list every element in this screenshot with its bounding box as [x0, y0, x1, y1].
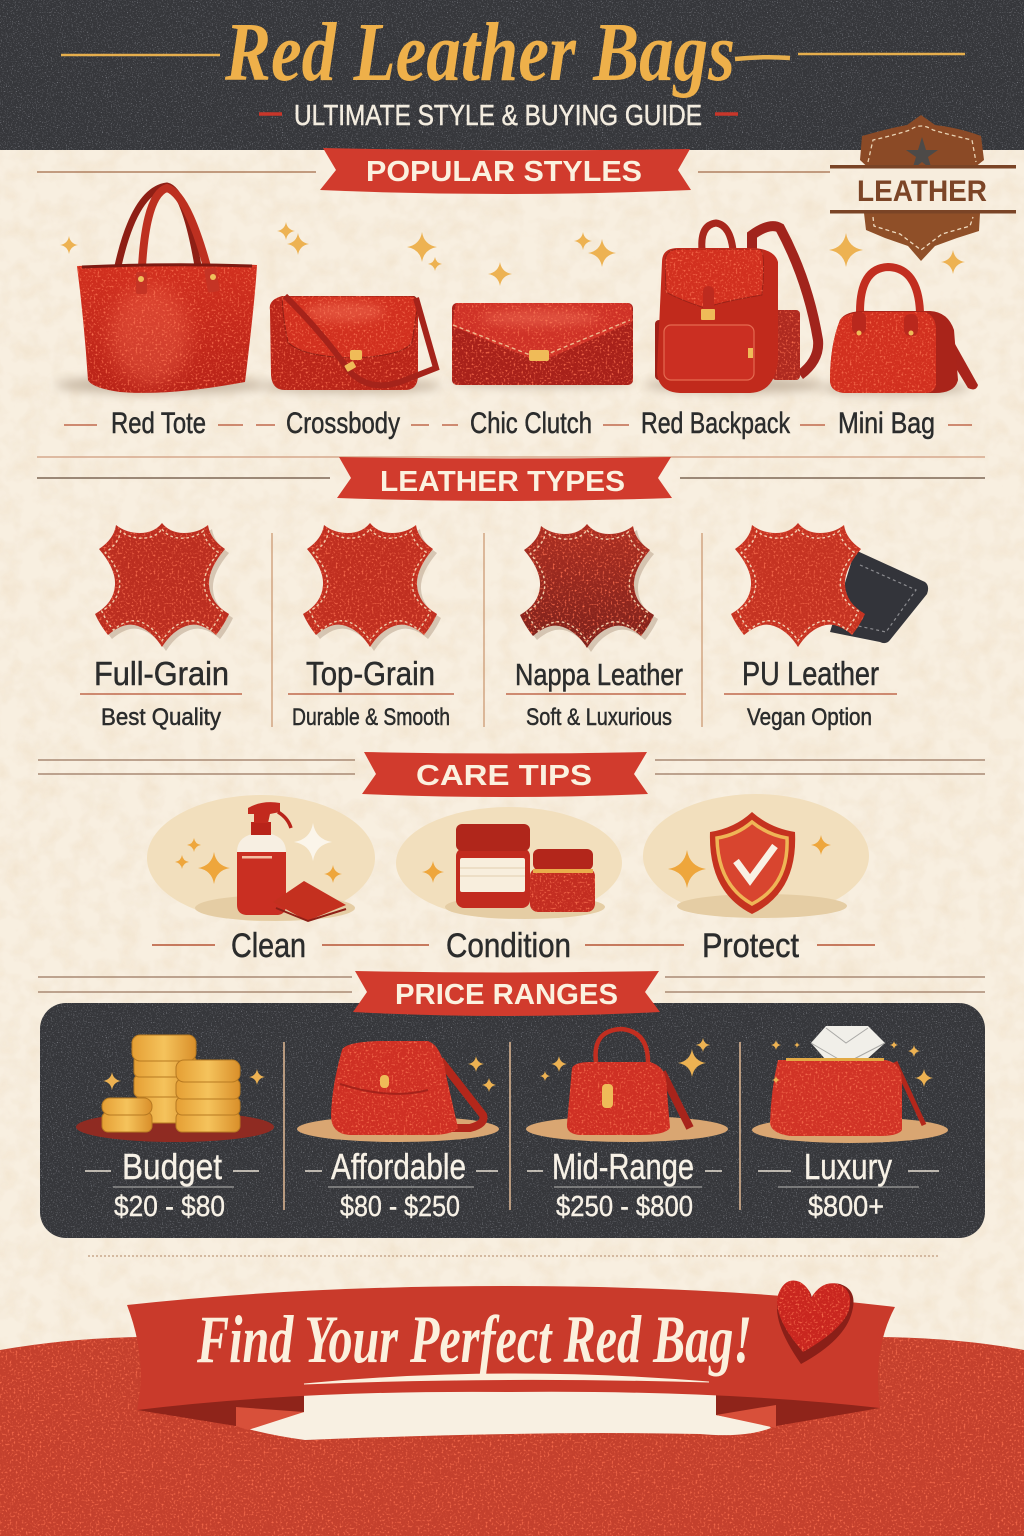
price tier: luxury	[752, 1026, 948, 1223]
ribbon heading: popular styles: POPULAR STYLES	[366, 156, 642, 188]
leather badge: LEATHER	[857, 175, 987, 208]
column dividers: leather types	[272, 533, 702, 727]
care icon: condition	[396, 807, 622, 919]
price tier: affordable	[297, 1041, 499, 1223]
price tier: budget	[76, 1035, 274, 1223]
leather type: pu leather: PU Leather	[742, 655, 879, 692]
care labels	[152, 927, 875, 965]
leather type: pu leather: Vegan Option	[747, 704, 872, 731]
ribbon heading: popular styles	[37, 148, 830, 194]
sparkles: popular styles	[60, 222, 965, 286]
bag: mini bag	[820, 267, 978, 395]
icon: heart	[777, 1281, 854, 1364]
leather badge	[830, 115, 1016, 261]
care icon: clean	[147, 795, 375, 921]
price tier: budget: $20 - $80	[114, 1191, 225, 1223]
price tier: mid-range: Mid-Range	[552, 1146, 694, 1187]
leather type: nappa leather: Nappa Leather	[515, 657, 683, 692]
closing banner: Find Your Perfect Red Bag!	[196, 1301, 752, 1377]
leather type: full-grain: Best Quality	[101, 704, 221, 731]
price tier: mid-range	[526, 1029, 728, 1223]
bag labels: Red Tote	[111, 407, 206, 440]
leather type: top-grain: Durable & Smooth	[292, 704, 450, 731]
leather type: pu leather	[724, 523, 928, 731]
price tier: affordable: $80 - $250	[340, 1191, 460, 1223]
bag labels: Mini Bag	[838, 407, 935, 440]
leather type: full-grain: Full-Grain	[94, 655, 229, 692]
price tier: mid-range: $250 - $800	[556, 1191, 693, 1223]
bag: red tote	[55, 186, 265, 394]
bag labels: Crossbody	[286, 407, 400, 440]
care labels: Clean	[231, 927, 306, 965]
title: Red Leather Bags	[224, 6, 735, 99]
leather type: nappa leather	[506, 524, 686, 731]
care labels: Protect	[702, 927, 799, 965]
price tier: budget: Budget	[122, 1146, 222, 1187]
bag: crossbody	[258, 296, 442, 393]
title flourishes	[61, 54, 965, 59]
bag: chic clutch	[450, 303, 634, 387]
subtitle: ULTIMATE STYLE & BUYING GUIDE	[294, 100, 702, 132]
bag: red backpack	[645, 223, 825, 393]
leather type: full-grain	[80, 523, 242, 731]
ribbon heading: leather types	[37, 457, 985, 501]
care icon: protect	[643, 794, 869, 918]
ribbon heading: price ranges: PRICE RANGES	[395, 979, 618, 1011]
cream notch under banner	[248, 1385, 771, 1440]
bag labels: Red Backpack	[641, 407, 791, 440]
bag labels	[64, 407, 972, 440]
care labels: Condition	[446, 927, 571, 965]
dotted separator	[88, 1255, 940, 1257]
price tier: luxury: Luxury	[804, 1146, 892, 1187]
closing banner	[127, 1286, 895, 1430]
price tier: luxury: $800+	[808, 1191, 884, 1223]
bag labels: Chic Clutch	[470, 407, 592, 440]
ribbon heading: care tips	[38, 752, 985, 797]
header band	[0, 0, 1024, 150]
ribbon heading: care tips: CARE TIPS	[416, 760, 592, 792]
leather type: nappa leather: Soft & Luxurious	[526, 704, 672, 731]
price tier: affordable: Affordable	[331, 1146, 466, 1187]
leather type: top-grain: Top-Grain	[306, 655, 435, 692]
ribbon heading: leather types: LEATHER TYPES	[380, 466, 625, 498]
leather type: top-grain	[288, 523, 454, 731]
bottom red ground	[0, 1337, 1024, 1536]
ribbon heading: price ranges	[353, 971, 660, 1016]
panel: price ranges	[38, 977, 985, 1238]
